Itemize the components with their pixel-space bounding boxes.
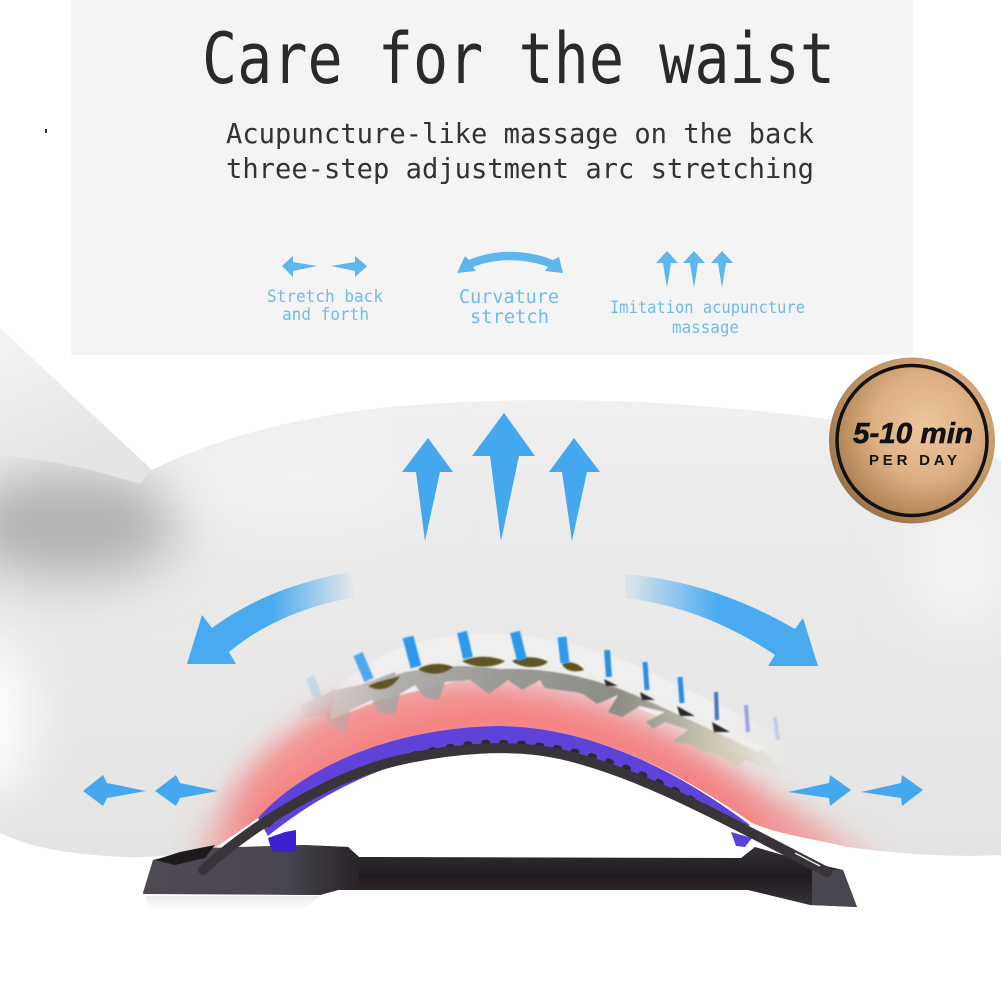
- arrow: left curve: [187, 572, 355, 664]
- title: Care for the waist: [202, 18, 835, 100]
- base: [143, 845, 857, 907]
- feature: imitation acupuncture massage: [610, 251, 805, 338]
- panel: header background: [71, 0, 913, 355]
- vertebra highlights: [395, 663, 760, 750]
- base reflection: [146, 896, 320, 912]
- subtitle text: Acupuncture-like massage on the back: [226, 117, 814, 150]
- feature: curvature stretch: [457, 252, 563, 328]
- label: imitation acupuncture massage: [610, 298, 805, 338]
- left foot: [143, 845, 359, 895]
- right foot: [812, 868, 857, 907]
- foot clip: [155, 845, 215, 865]
- body silhouette: [0, 320, 1001, 880]
- arrows: lower left: [83, 775, 218, 806]
- arrows: lower right: [788, 775, 923, 806]
- red heat glow: [186, 680, 875, 850]
- purple pad right: [731, 832, 752, 847]
- label: stretch back and forth: and forth: [282, 305, 369, 325]
- vertebrae: [300, 664, 780, 772]
- black arch band: [203, 748, 827, 872]
- purple pad left: [268, 830, 296, 852]
- icon: three up arrows: [656, 251, 733, 288]
- icon: curved double arrow: [457, 252, 563, 273]
- speck: [45, 129, 47, 133]
- label: curvature stretch: stretch: [470, 306, 549, 328]
- badge: 5-10 min per day: PER DAY: [869, 452, 957, 469]
- label: stretch back and forth: Stretch back: [267, 287, 383, 307]
- badge: 5-10 min per day: 5-10 min: [853, 418, 973, 450]
- subtitle text: [226, 117, 814, 185]
- stretcher device: [143, 726, 857, 912]
- arrow: right curve: [625, 574, 818, 666]
- icon: left and right arrows: [282, 256, 367, 277]
- badge: 5-10 min per day: [829, 358, 995, 524]
- label: imitation acupuncture massage: Imitation acupuncture: [610, 298, 805, 318]
- blue spine markers: [310, 632, 778, 740]
- label: imitation acupuncture massage: massage: [672, 318, 739, 338]
- arrows: three up: [402, 413, 600, 541]
- label: curvature stretch: Curvature: [459, 286, 559, 308]
- label: stretch back and forth: [267, 287, 383, 325]
- icon: spine: [300, 632, 790, 772]
- feature: stretch back and forth: [267, 256, 383, 325]
- vertebra shadows: [368, 657, 584, 689]
- subtitle text: three-step adjustment arc stretching: [226, 152, 814, 185]
- purple arch surface: [258, 726, 750, 836]
- band highlight: [795, 853, 820, 866]
- massage studs: [268, 743, 745, 830]
- label: curvature stretch: [459, 286, 559, 328]
